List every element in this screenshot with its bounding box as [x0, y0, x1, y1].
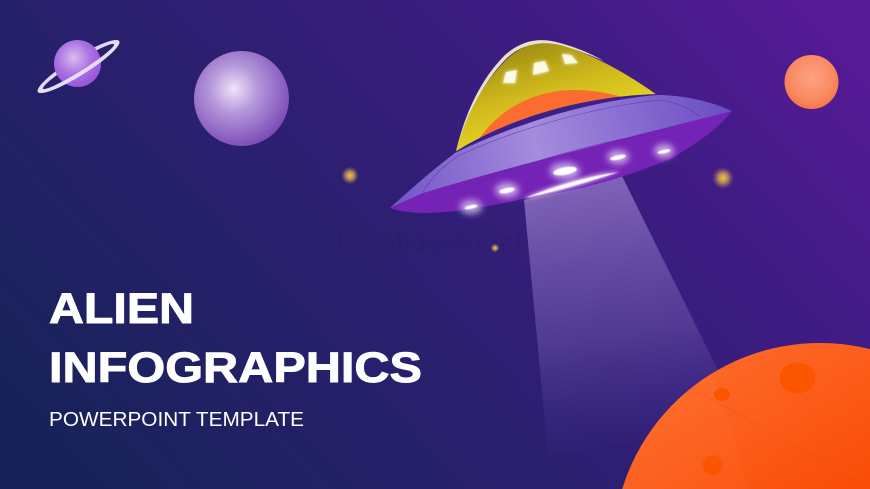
orange inner dome — [477, 90, 622, 142]
planet: small peach — [784, 55, 838, 109]
ring: front — [38, 41, 124, 100]
beam emitter — [523, 171, 620, 199]
dome window: left — [503, 70, 517, 83]
subtitle: POWERPOINT TEMPLATE — [49, 408, 304, 431]
hull lights — [460, 144, 674, 214]
light glow — [460, 144, 674, 214]
ring: back — [33, 33, 124, 100]
title — [49, 285, 422, 392]
planet body — [54, 40, 101, 87]
hull seam lines — [423, 100, 705, 213]
crater: lower — [702, 455, 722, 475]
crater: small — [714, 388, 730, 401]
dark shadow under dome — [455, 94, 657, 154]
saucer lower hull — [390, 95, 732, 213]
light cores — [464, 148, 671, 210]
star: centre — [490, 244, 500, 252]
planet: ringed planet — [33, 33, 124, 100]
title: ALIEN — [49, 285, 194, 333]
star: left — [341, 166, 359, 184]
dome window: middle — [533, 61, 549, 75]
crater: large — [780, 362, 816, 394]
watermark — [340, 224, 522, 257]
watermark: SlideModel — [377, 227, 522, 257]
star: right — [712, 167, 734, 189]
saucer upper hull — [390, 95, 732, 208]
dome rim — [456, 40, 604, 151]
dome window: right — [562, 54, 578, 64]
planet: orange mars — [622, 343, 870, 489]
dome — [456, 43, 657, 151]
title: INFOGRAPHICS — [49, 344, 422, 392]
planet: large lilac — [194, 51, 289, 146]
beam sheen on planet — [622, 373, 748, 489]
light beam — [524, 172, 745, 455]
UFO — [390, 40, 732, 214]
